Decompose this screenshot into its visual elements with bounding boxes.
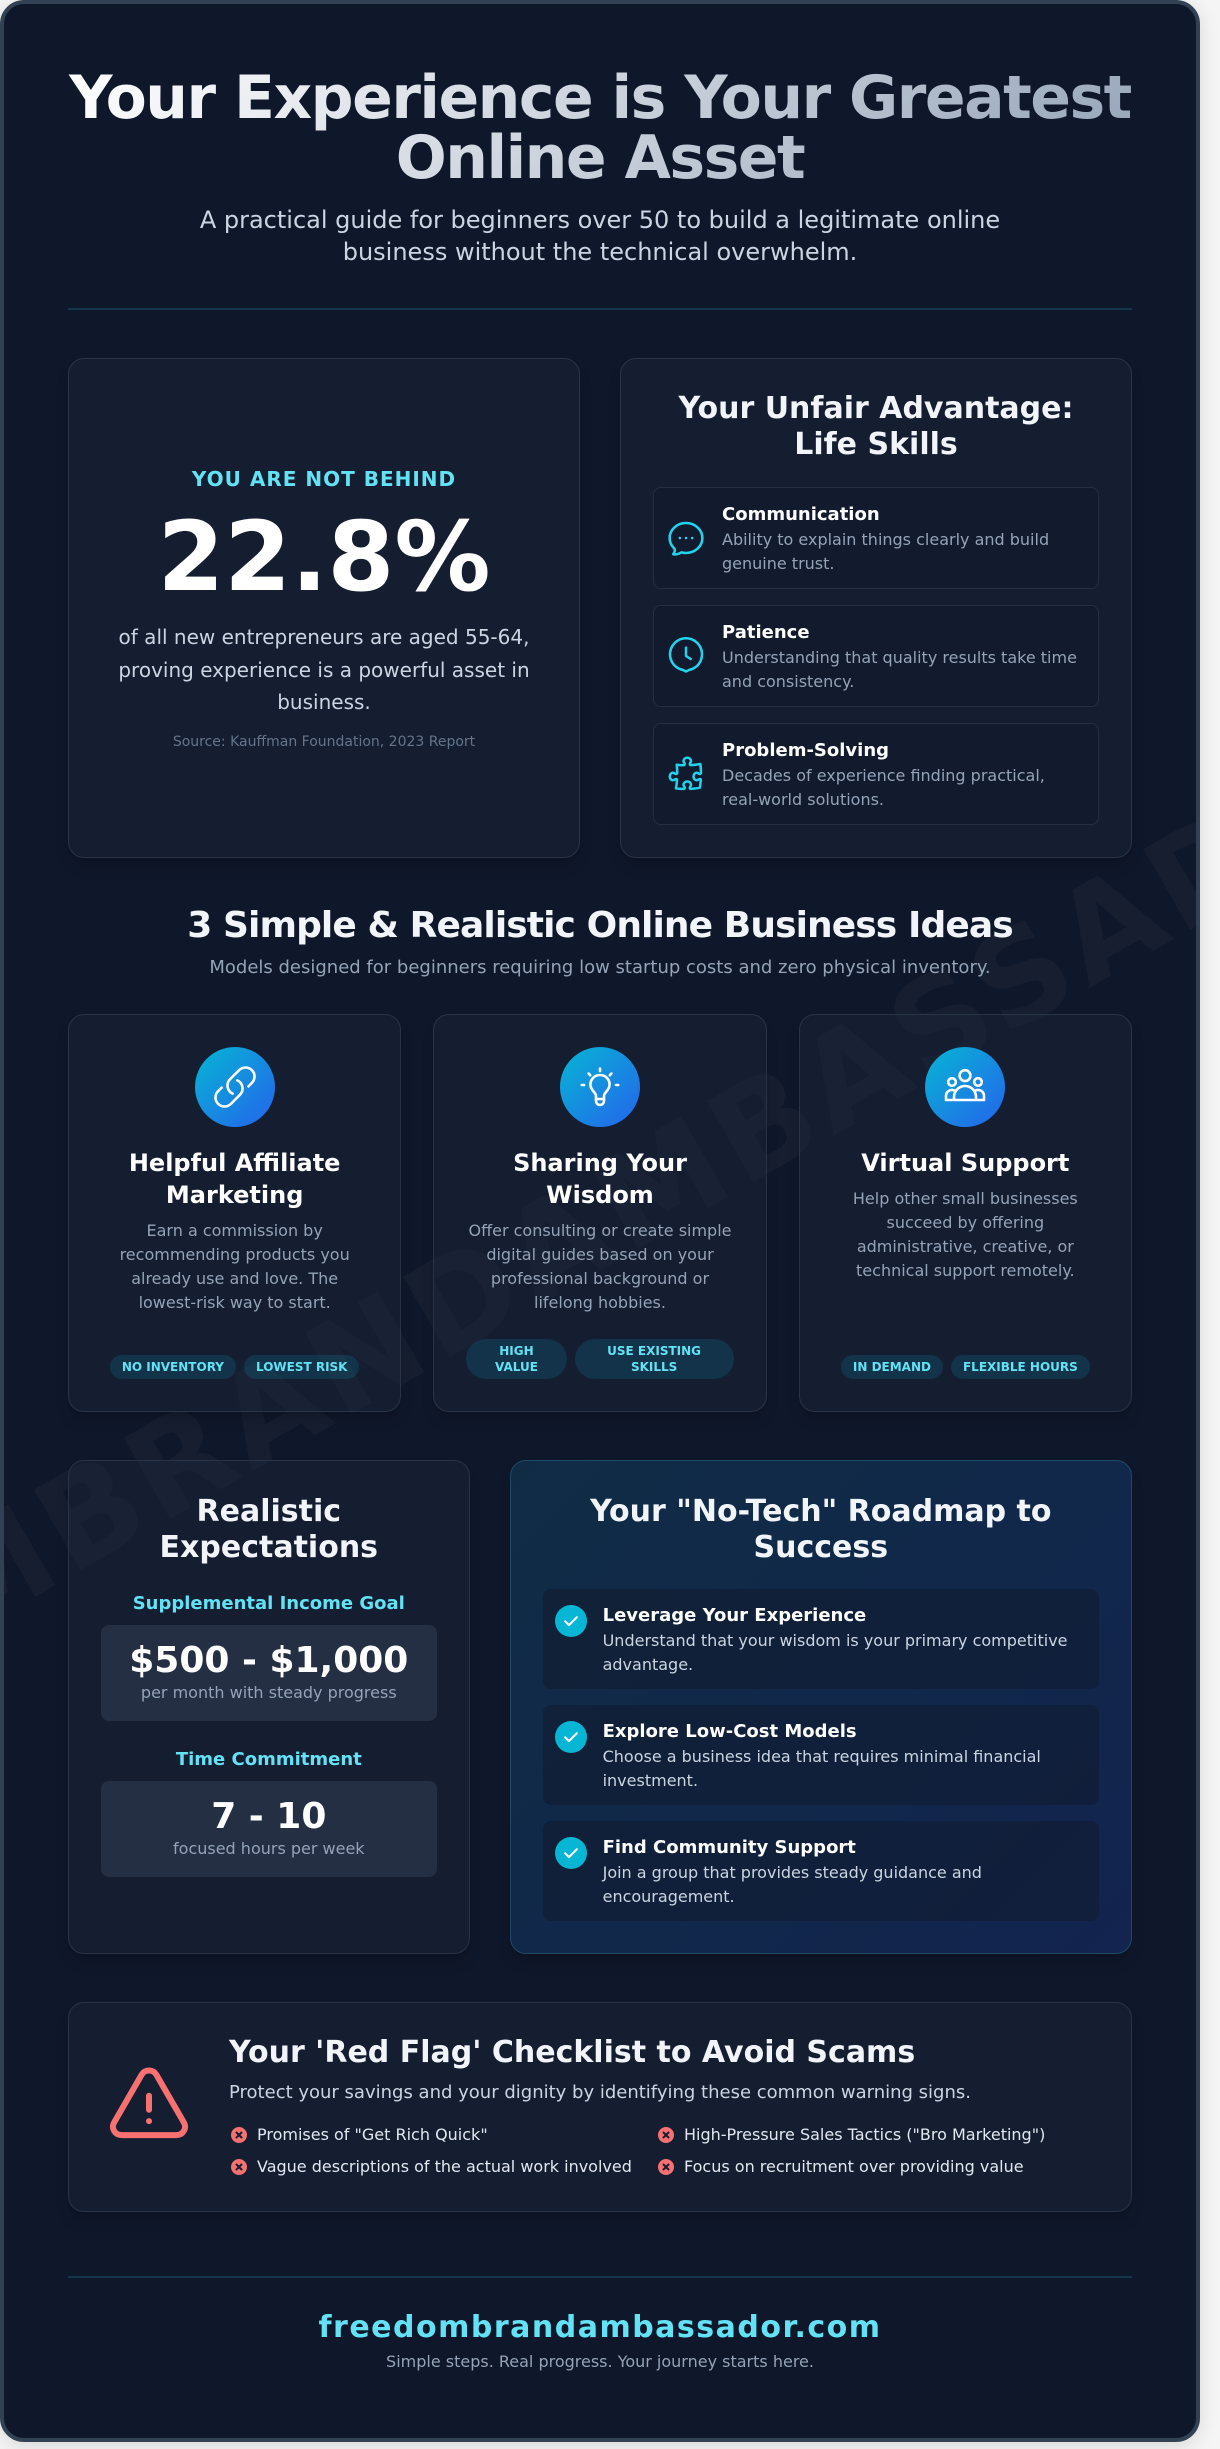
card title: Sharing Your Wisdom bbox=[513, 1149, 687, 1209]
stat number: 22.8% bbox=[157, 501, 491, 613]
warning item: Vague descriptions of the actual work involved bbox=[257, 2157, 632, 2176]
panel: virtual support bbox=[799, 1014, 1132, 1412]
subtitle: A practical guide for beginners over 50 to build a legitimate online business without the technical overwhelm. bbox=[200, 206, 1000, 266]
checklist intro: Protect your savings and your dignity by identifying these common warning signs. bbox=[229, 2082, 971, 2103]
tags: USE EXISTING SKILLS bbox=[607, 1344, 701, 1374]
tags: IN DEMAND bbox=[853, 1360, 931, 1374]
income box: $500 - $1,000 bbox=[129, 1640, 408, 1681]
time box: focused hours per week bbox=[173, 1839, 365, 1858]
stat description: of all new entrepreneurs are aged 55-64, proving experience is a powerful asset in business. bbox=[118, 625, 530, 714]
income box: per month with steady progress bbox=[141, 1683, 397, 1702]
skill: patience: Understanding that quality results take time and consistency. bbox=[722, 648, 1077, 691]
warning item: Focus on recruitment over providing value bbox=[684, 2157, 1024, 2176]
panel heading: Your Unfair Advantage: Life Skills bbox=[679, 391, 1073, 462]
income box bbox=[101, 1625, 437, 1721]
card text: Help other small businesses succeed by offering administrative, creative, or technical support remotely. bbox=[853, 1189, 1078, 1280]
tags: HIGH VALUE bbox=[495, 1344, 538, 1374]
tags: FLEXIBLE HOURS bbox=[963, 1360, 1078, 1374]
warning list bbox=[231, 2125, 1045, 2176]
section heading: business ideas bbox=[187, 905, 1013, 978]
tags bbox=[110, 1355, 359, 1379]
income label: Supplemental Income Goal bbox=[133, 1593, 405, 1614]
checklist heading: Your 'Red Flag' Checklist to Avoid Scams bbox=[229, 2035, 915, 2070]
header bbox=[68, 68, 1132, 310]
panel: red flag checklist bbox=[68, 2002, 1132, 2212]
time box bbox=[101, 1781, 437, 1877]
title: Your Experience is Your Greatest Online Asset bbox=[69, 63, 1131, 193]
step: low-cost models: Explore Low-Cost Models bbox=[603, 1721, 857, 1742]
checklist text bbox=[228, 2035, 1045, 2176]
step: leverage experience: Understand that your wisdom is your primary competitive advantage. bbox=[603, 1631, 1068, 1674]
section subtitle: Models designed for beginners requiring low startup costs and zero physical inventory. bbox=[209, 957, 991, 978]
section title: 3 Simple & Realistic Online Business Ideas bbox=[187, 905, 1013, 946]
skill list bbox=[653, 487, 1099, 825]
stat source: Source: Kauffman Foundation, 2023 Report bbox=[173, 734, 475, 750]
card title: Virtual Support bbox=[861, 1149, 1069, 1177]
tags: NO INVENTORY bbox=[122, 1360, 224, 1374]
panel: affiliate marketing bbox=[68, 1014, 401, 1412]
panel: statistic bbox=[68, 358, 580, 858]
footer bbox=[68, 2276, 1132, 2374]
top row panels bbox=[68, 358, 1132, 858]
tags bbox=[841, 1355, 1090, 1379]
card title: Helpful Affiliate Marketing bbox=[129, 1149, 340, 1209]
skill: problem solving: Decades of experience finding practical, real-world solutions. bbox=[722, 766, 1045, 809]
stat label: YOU ARE NOT BEHIND bbox=[192, 467, 456, 491]
step: community support: Find Community Support bbox=[603, 1837, 856, 1858]
business idea cards bbox=[68, 1014, 1132, 1414]
step: community support bbox=[543, 1821, 1099, 1921]
icon: link bbox=[195, 1047, 275, 1127]
expectations and roadmap row bbox=[68, 1460, 1132, 1954]
panel: no-tech roadmap bbox=[510, 1460, 1132, 1954]
skill: communication: Ability to explain things clearly and build genuine trust. bbox=[722, 530, 1049, 573]
card text: Offer consulting or create simple digital guides based on your professional background or lifelong hobbies. bbox=[468, 1221, 732, 1312]
step: leverage experience bbox=[543, 1589, 1099, 1689]
time box: 7 - 10 bbox=[211, 1796, 326, 1837]
card text: Earn a commission by recommending products you already use and love. The lowest-risk way to start. bbox=[120, 1221, 350, 1312]
skill: communication bbox=[653, 487, 1099, 589]
icon: people bbox=[925, 1047, 1005, 1127]
skill: problem solving bbox=[653, 723, 1099, 825]
time label: Time Commitment bbox=[176, 1749, 362, 1770]
website url: freedombrandambassador.com bbox=[318, 2310, 882, 2345]
panel: life skills bbox=[620, 358, 1132, 858]
tags bbox=[466, 1339, 734, 1379]
panel: sharing wisdom bbox=[433, 1014, 767, 1412]
skill: communication: Communication bbox=[722, 504, 880, 525]
footer tagline: Simple steps. Real progress. Your journey starts here. bbox=[386, 2352, 814, 2371]
skill: problem solving: Problem-Solving bbox=[722, 740, 889, 761]
skill: patience bbox=[653, 605, 1099, 707]
panel: realistic expectations bbox=[68, 1460, 470, 1954]
icon: warning triangle bbox=[110, 2068, 188, 2138]
step: community support: Join a group that provides steady guidance and encouragement. bbox=[603, 1863, 982, 1906]
icon: light bulb bbox=[560, 1047, 640, 1127]
panel heading: Realistic Expectations bbox=[160, 1494, 378, 1565]
step: leverage experience: Leverage Your Experience bbox=[603, 1605, 866, 1626]
skill: patience: Patience bbox=[722, 622, 810, 643]
step: low-cost models bbox=[543, 1705, 1099, 1805]
warning item: Promises of "Get Rich Quick" bbox=[257, 2125, 488, 2144]
panel heading: Your "No-Tech" Roadmap to Success bbox=[590, 1494, 1052, 1565]
warning item: High-Pressure Sales Tactics ("Bro Marketing") bbox=[684, 2125, 1045, 2144]
step: low-cost models: Choose a business idea that requires minimal financial investment. bbox=[603, 1747, 1041, 1790]
roadmap steps bbox=[543, 1589, 1099, 1921]
tags: LOWEST RISK bbox=[256, 1360, 347, 1374]
